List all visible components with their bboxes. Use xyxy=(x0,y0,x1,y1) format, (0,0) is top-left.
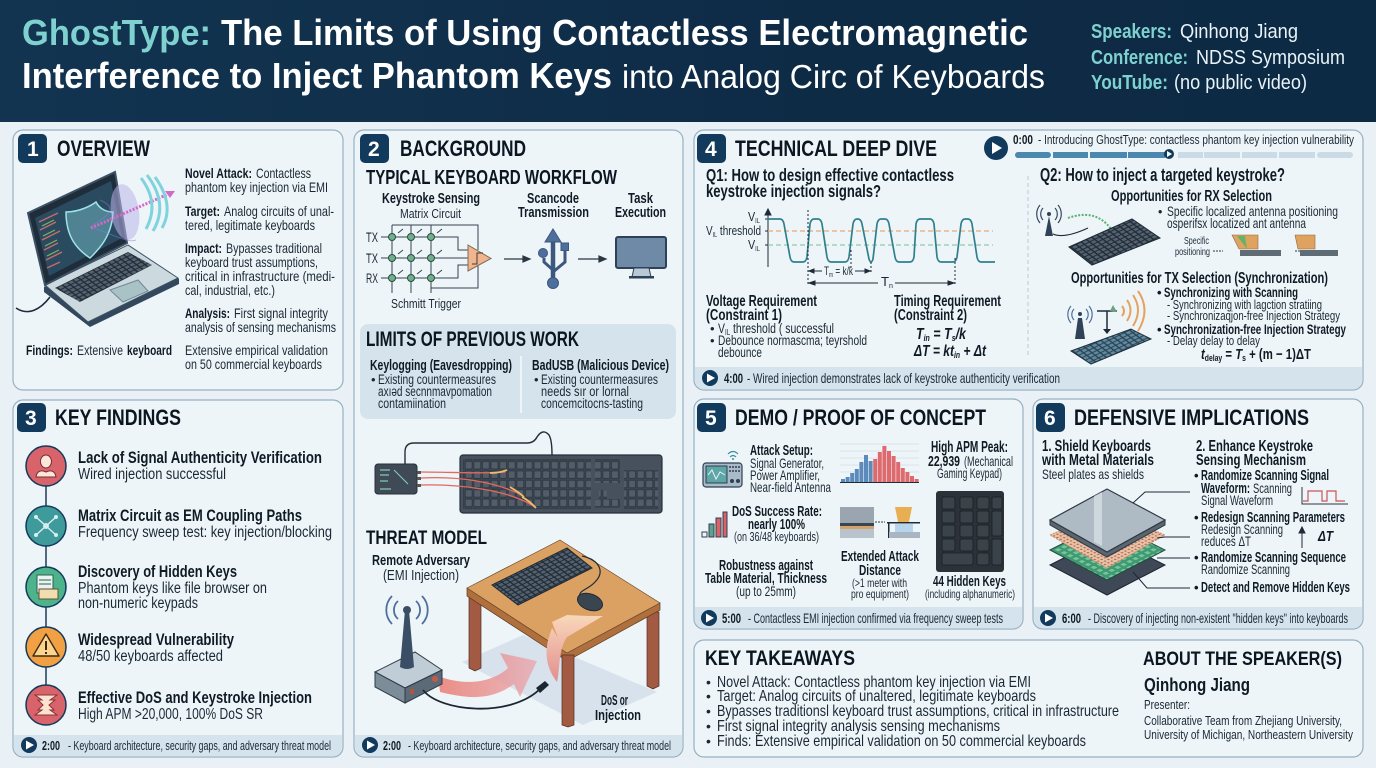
text block: enhance sensing: Waveform: xyxy=(1201,481,1250,497)
text block: overview bullets: First signal integrity xyxy=(234,305,328,321)
text block: attack setup: Power Amplifier, xyxy=(750,467,820,483)
panel: takeaways and speaker xyxy=(694,640,1363,757)
text block: RX selection xyxy=(1111,188,1338,231)
text block: RX selection: • xyxy=(1158,205,1162,219)
panel: defensive implications xyxy=(1033,399,1363,629)
divider xyxy=(1027,176,1029,356)
text block: TX selection: delay xyxy=(1205,353,1222,363)
text block: DoS success rate: (on 36/48 keyboards) xyxy=(734,529,819,544)
text block: key takeaways: Novel Attack: Contactless phantom key injection via EMI xyxy=(717,674,1031,691)
icon: antenna positioning diagram: positioning xyxy=(1175,247,1210,258)
text block: voltage requirement: threshold ( successful xyxy=(730,321,834,336)
text block: enhance sensing: reduces ΔT xyxy=(1201,533,1251,549)
chart: injection waveform timing: T xyxy=(881,274,889,289)
finding: signal authenticity: Lack of Signal Authenticity Verification xyxy=(78,449,322,467)
video timestamp strip: 6:00 xyxy=(1062,610,1081,626)
limit: BadUSB: • xyxy=(534,372,539,387)
heading: key findings: KEY FINDINGS xyxy=(55,405,181,430)
heading: demo: DEMO / PROOF OF CONCEPT xyxy=(735,405,986,430)
text block: robustness: Table Material, Thickness xyxy=(705,570,827,587)
label: DoS or injection xyxy=(595,692,641,724)
text block: robustness: Robustness against xyxy=(719,557,813,574)
text block: enhance sensing: • xyxy=(1194,468,1199,483)
text block: attack setup xyxy=(750,443,831,495)
text block: enhance sensing: Randomize Scanning xyxy=(1201,561,1290,577)
video timestamp strip: - Wired injection demonstrates lack of keystroke authenticity verification xyxy=(747,370,1060,386)
text block: key takeaways: Bypasses traditionsl keyboard trust assumptions, critical in infrastructure xyxy=(717,703,1119,720)
chart: matrix circuit with Schmitt trigger: TX xyxy=(366,229,378,245)
text block: timing requirement: = T xyxy=(930,326,953,343)
title: Interference to Inject Phantom Keys xyxy=(22,55,612,96)
text block: high APM peak: (Mechanical xyxy=(964,453,1013,469)
text block: high APM peak: Gaming Keypad) xyxy=(937,465,1002,481)
limit: keylogging: Existing countermeasures xyxy=(378,372,496,387)
label: DoS or injection: Injection xyxy=(595,707,641,724)
heading: Q1: keystroke injection signals? xyxy=(706,181,881,201)
limit: keylogging: contamiination xyxy=(378,396,446,411)
text block: enhance sensing xyxy=(1194,438,1350,596)
text block: overview bullets: Bypasses traditional xyxy=(226,240,322,256)
video timestamp strip: - Keyboard architecture, security gaps, and adversary threat model xyxy=(408,738,671,753)
heading: defensive implications: 6 xyxy=(1044,407,1056,430)
text block: DoS success rate: DoS Success Rate: xyxy=(732,503,822,520)
text block: findings: keyboard xyxy=(127,342,172,358)
text block: overview bullets: Extensive empirical validation xyxy=(185,342,328,358)
text block: overview bullets: Analog circuits of unal- xyxy=(224,203,334,219)
finding: DoS and keystroke injection: Effective DoS and Keystroke Injection xyxy=(78,689,312,707)
text block: TX selection: + (m − 1)ΔT xyxy=(1246,346,1311,363)
heading: demo: 5 xyxy=(705,407,717,430)
title xyxy=(22,12,1045,96)
title: The Limits of Using Contactless Electromagnetic xyxy=(221,12,1028,53)
chart: injection waveform timing xyxy=(706,209,995,290)
panel: key findings xyxy=(13,400,343,757)
text block: attack setup: Signal Generator, xyxy=(750,455,824,471)
heading: technical deep dive: 4 xyxy=(705,138,717,161)
video timestamp strip xyxy=(695,367,1362,390)
heading: overview xyxy=(18,134,150,163)
limit: BadUSB xyxy=(532,358,669,411)
workflow labels xyxy=(382,190,666,221)
limit: keylogging: axıəd secnnmavpomation xyxy=(378,384,492,399)
video timestamp strip xyxy=(355,735,682,756)
heading: background xyxy=(360,134,526,163)
limit: BadUSB: Existing countermeasures xyxy=(541,372,658,387)
text block: voltage requirement: V xyxy=(718,321,727,336)
finding: hidden keys xyxy=(26,563,267,612)
workflow labels: Execution xyxy=(615,204,666,221)
speaker details: (no public video) xyxy=(1174,72,1307,94)
text block: hidden keys: (including alphanumeric) xyxy=(925,587,1015,601)
text block: TX selection: • xyxy=(1157,285,1162,300)
text block: DoS success rate: nearly 100% xyxy=(748,516,805,533)
finding: hidden keys: Phantom keys like file browser on xyxy=(78,580,267,597)
icon: antenna transmitter xyxy=(375,596,549,709)
header banner xyxy=(0,0,1376,122)
text block: timing requirement: s xyxy=(952,333,956,343)
chart: scanning waveform xyxy=(1302,487,1348,504)
text block: about the speaker: Presenter: xyxy=(1144,697,1190,712)
chart: matrix circuit with Schmitt trigger: Schmitt Trigger xyxy=(391,296,462,311)
panel: overview xyxy=(13,130,343,390)
icon: laptop under electromagnetic attack xyxy=(16,172,179,327)
text block: robustness xyxy=(705,557,827,599)
finding: matrix circuit: Frequency sweep test: key injection/blocking xyxy=(78,524,332,541)
text block: TX selection: - Synchronizing with lagction stratiing xyxy=(1167,297,1322,312)
text block: overview bullets: critical in infrastructure (medi- xyxy=(185,268,335,284)
text block: overview bullets: Analysis: xyxy=(185,305,230,321)
chart: injection waveform timing: m xyxy=(829,272,833,279)
icon: wired injection into keyboard xyxy=(375,432,662,513)
video timestamp strip: 2:00 xyxy=(42,738,60,753)
text block: overview bullets: cal, industrial, etc.) xyxy=(185,282,275,298)
text block: enhance sensing: • xyxy=(1194,510,1199,525)
text block: key takeaways: First signal integrity analysis sensing mechanisms xyxy=(717,718,1000,735)
text block: overview bullets: analysis of sensing mechanisms xyxy=(185,319,336,335)
icon: USB xyxy=(538,229,568,288)
icon: desk with keyboard and mouse xyxy=(462,540,660,727)
text block: high APM peak xyxy=(928,439,1013,481)
text block: key takeaways: Finds: Extensive empirical validation on 50 commercial keyboards xyxy=(717,733,1086,750)
video timestamp strip: - Keyboard architecture, security gaps, and adversary threat model xyxy=(68,738,331,753)
text block: timing requirement: + Δt xyxy=(960,343,987,360)
text block: overview bullets: tered, legitimate keyboards xyxy=(185,217,315,233)
chart: injection waveform timing: V xyxy=(748,209,757,224)
chart: injection waveform timing: n xyxy=(889,283,893,290)
text block: RX selection: Opportunities for RX Selection xyxy=(1111,188,1272,205)
chart: injection waveform timing: IL xyxy=(713,232,717,239)
panel: limits of previous work xyxy=(360,324,676,419)
text block: attack setup: Attack Setup: xyxy=(750,443,813,459)
text block: TX selection xyxy=(1071,270,1346,363)
text block: timing requirement: in xyxy=(924,333,930,343)
video timestamp strip: 5:00 xyxy=(722,610,741,626)
limit: BadUSB: needs sır or lornal xyxy=(541,384,629,399)
text block: overview bullets: keyboard trust assumptions, xyxy=(185,254,318,270)
heading: background: 2 xyxy=(368,138,380,161)
text block: timing requirement: ΔT = kt xyxy=(914,343,967,360)
panel: limits of previous work: LIMITS OF PREVIOUS WORK xyxy=(366,328,579,351)
text block: voltage requirement xyxy=(706,293,867,360)
icon: table material and distance xyxy=(840,507,920,538)
text block: enhance sensing: • xyxy=(1194,580,1199,595)
finding: widespread vulnerability: 48/50 keyboards affected xyxy=(78,648,223,665)
text block: about the speaker: Qinhong Jiang xyxy=(1144,675,1250,695)
heading: defensive implications: DEFENSIVE IMPLICATIONS xyxy=(1074,405,1309,430)
text block: key takeaways: • xyxy=(706,674,711,690)
text block: voltage requirement: IL xyxy=(725,328,731,337)
text block: enhance sensing: 2. Enhance Keystroke xyxy=(1196,438,1313,455)
video progress timeline: 0:00 xyxy=(1013,132,1033,147)
heading: technical deep dive: TECHNICAL DEEP DIVE xyxy=(735,136,937,161)
text block: enhance sensing: • xyxy=(1194,550,1199,565)
subheading: workflow: TYPICAL KEYBOARD WORKFLOW xyxy=(366,167,617,189)
text block: timing requirement: T xyxy=(916,326,926,343)
text block: timing requirement: Timing Requirement xyxy=(894,293,1001,310)
video timestamp strip xyxy=(695,607,1022,628)
finding: hidden keys: Discovery of Hidden Keys xyxy=(78,563,237,581)
text block: about the speaker: ABOUT THE SPEAKER(S) xyxy=(1143,649,1342,670)
icon: keypad with hidden keys xyxy=(936,491,1004,572)
subheading: threat model: THREAT MODEL xyxy=(366,528,487,549)
text block: hidden keys: 44 Hidden Keys xyxy=(933,573,1006,590)
text block: extended distance xyxy=(841,548,919,601)
icon: TX antenna and keyboard xyxy=(1068,291,1151,364)
heading: Q1 xyxy=(706,165,954,201)
workflow labels: Task xyxy=(628,190,653,207)
icon: antenna positioning diagram xyxy=(1175,235,1338,258)
finding: widespread vulnerability: Widespread Vulnerability xyxy=(78,631,235,649)
timeline connector xyxy=(45,486,47,690)
icon: signal generator xyxy=(703,452,742,487)
text block: overview bullets: Contactless xyxy=(256,165,311,181)
arrow: EMI path from antenna to desk xyxy=(438,615,603,697)
chart: injection waveform timing: IL xyxy=(755,246,760,253)
finding: DoS and keystroke injection xyxy=(26,685,312,725)
panel: technical deep dive xyxy=(694,130,1363,390)
speaker details: Conference: xyxy=(1091,47,1188,69)
heading: overview: 1 xyxy=(27,138,39,161)
leader lines xyxy=(1133,492,1190,588)
video timestamp strip: 4:00 xyxy=(724,370,743,386)
chart: injection waveform timing: IL xyxy=(755,218,760,225)
finding: widespread vulnerability xyxy=(26,627,235,667)
text block: overview bullets: Novel Attack: xyxy=(185,165,252,181)
text block: timing requirement: (Constraint 2) xyxy=(894,307,967,324)
text block: hidden keys xyxy=(925,573,1015,601)
text block: findings: Extensive xyxy=(77,342,123,358)
icon: monitor xyxy=(616,237,666,278)
finding: DoS and keystroke injection: High APM >20,000, 100% DoS SR xyxy=(78,706,263,723)
heading: key findings: 3 xyxy=(25,407,37,430)
text block: TX selection: • xyxy=(1157,322,1162,337)
chart: injection waveform timing: V xyxy=(748,237,757,252)
arrow: delta T: ΔT xyxy=(1317,528,1334,545)
text block: key takeaways xyxy=(705,647,1119,750)
text block: key takeaways: • xyxy=(706,688,711,704)
text block: robustness: (up to 25mm) xyxy=(736,583,796,599)
text block: high APM peak: High APM Peak: xyxy=(931,439,1008,456)
text block: shield keyboards: with Metal Materials xyxy=(1041,452,1154,469)
text block: overview bullets: Target: xyxy=(185,203,220,219)
workflow labels: Scancode xyxy=(527,190,579,207)
text block: findings: Findings: xyxy=(26,342,73,358)
speaker details: YouTube: xyxy=(1091,72,1168,94)
text block: TX selection: s xyxy=(1242,353,1246,363)
video timestamp strip xyxy=(14,735,342,756)
text block: extended distance: Extended Attack xyxy=(841,548,919,565)
limit: BadUSB: BadUSB (Malicious Device) xyxy=(532,358,669,374)
text block: key takeaways: • xyxy=(706,718,711,734)
text block: TX selection: t xyxy=(1201,346,1206,363)
chart: matrix circuit with Schmitt trigger: TX xyxy=(366,250,378,266)
text block: extended distance: Distance xyxy=(859,562,901,579)
limit: BadUSB: concemcitocns-tasting xyxy=(541,396,643,411)
chart: APM frequency bars xyxy=(840,444,919,482)
threat model labels: Remote Adversary xyxy=(372,552,470,569)
limit: keylogging: Keylogging (Eavesdropping) xyxy=(370,358,512,374)
panel: demo / proof of concept xyxy=(694,399,1023,629)
text block: attack setup: Near-field Antenna xyxy=(750,479,831,495)
title: into Analog Circ of Keyboards xyxy=(622,58,1045,95)
threat model labels: (EMI Injection) xyxy=(383,567,459,584)
text block: voltage requirement: debounce xyxy=(718,345,762,360)
text block: shield keyboards xyxy=(1041,438,1154,482)
text block: TX selection: T xyxy=(1235,346,1244,363)
text block: enhance sensing: Sensing Mechanism xyxy=(1196,452,1306,469)
threat model labels xyxy=(372,552,470,584)
finding: hidden keys: non-numeric keypads xyxy=(78,595,198,612)
text block: voltage requirement: • xyxy=(710,333,715,348)
text block: key takeaways: KEY TAKEAWAYS xyxy=(705,647,855,670)
finding: matrix circuit xyxy=(26,506,332,546)
text block: TX selection: - Delay delay to delay xyxy=(1167,333,1260,348)
arrow: matrix to USB xyxy=(504,256,530,262)
chart: injection waveform timing: V xyxy=(706,223,715,238)
text block: timing requirement: /k xyxy=(955,326,967,343)
text block: overview bullets xyxy=(185,165,336,372)
chart: matrix circuit with Schmitt trigger: RX xyxy=(366,270,378,286)
text block: voltage requirement: • xyxy=(710,321,715,336)
text block: key takeaways: • xyxy=(706,703,711,719)
workflow labels: Matrix Circuit xyxy=(400,206,461,221)
title: GhostType: xyxy=(22,12,211,53)
icon: DoS bars xyxy=(702,512,727,537)
text block: overview bullets: on 50 commercial keyboards xyxy=(185,356,322,372)
chart: injection waveform timing: T xyxy=(824,264,831,278)
text block: extended distance: (>1 meter with xyxy=(852,576,907,590)
heading: Q1: Q1: How to design effective contactless xyxy=(706,165,954,185)
limit: keylogging xyxy=(370,358,512,411)
workflow labels: Keystroke Sensing xyxy=(382,190,480,207)
video timestamp strip xyxy=(1034,607,1362,628)
chart: matrix circuit with Schmitt trigger xyxy=(366,225,491,311)
heading: technical deep dive xyxy=(697,134,937,163)
icon: exploded keyboard layers xyxy=(1050,489,1165,595)
heading: overview: OVERVIEW xyxy=(57,136,150,161)
workflow labels: Transmission xyxy=(518,204,589,221)
heading: demo xyxy=(697,403,986,432)
text block: key takeaways: Target: Analog circuits of unaltered, legitimate keyboards xyxy=(717,688,1036,705)
text block: TX selection: Synchronizing with Scanning xyxy=(1164,284,1298,300)
panel: background xyxy=(354,130,683,757)
finding: matrix circuit: Matrix Circuit as EM Coupling Paths xyxy=(78,507,302,525)
finding: signal authenticity xyxy=(26,446,322,486)
icon: RX antenna and keyboard xyxy=(1037,205,1160,265)
heading: background: BACKGROUND xyxy=(400,136,526,161)
video timestamp strip: 2:00 xyxy=(383,738,401,753)
text block: RX selection: osperifsx locatized ant antenna xyxy=(1167,215,1306,231)
text block: overview bullets: phantom key injection via EMI xyxy=(185,179,328,195)
speaker details xyxy=(1091,21,1345,94)
heading: key findings xyxy=(17,403,181,432)
video progress timeline xyxy=(984,132,1354,160)
speaker details: NDSS Symposium xyxy=(1196,47,1345,69)
speaker details: Speakers: xyxy=(1091,21,1172,43)
chart: injection waveform timing: threshold xyxy=(717,223,761,238)
text block: key takeaways: • xyxy=(706,733,711,749)
text block: high APM peak: 22,939 xyxy=(928,453,960,470)
text block: extended distance: pro equipment) xyxy=(851,587,909,601)
icon: antenna positioning diagram: Specific xyxy=(1184,236,1209,247)
speaker details: Qinhong Jiang xyxy=(1180,21,1298,43)
text block: shield keyboards: Steel plates as shields xyxy=(1042,466,1144,482)
text block: voltage requirement: Debounce normascma; teyrshold xyxy=(718,333,867,348)
text block: timing requirement xyxy=(894,293,1001,360)
text block: timing requirement: in xyxy=(954,350,960,360)
text block: voltage requirement: (Constraint 1) xyxy=(706,307,782,324)
text block: about the speaker xyxy=(1143,649,1353,742)
text block: enhance sensing: Scanning xyxy=(1253,480,1292,496)
text block: enhance sensing: Redesign Scanning xyxy=(1201,521,1283,537)
text block: shield keyboards: 1. Shield Keyboards xyxy=(1042,438,1151,455)
chart: injection waveform timing: = k/k xyxy=(833,264,854,278)
text block: voltage requirement: Voltage Requirement xyxy=(706,293,817,310)
text block: overview bullets: Impact: xyxy=(185,240,222,256)
video timestamp strip: - Contactless EMI injection confirmed via frequency sweep tests xyxy=(748,610,1003,626)
arrow: USB to monitor xyxy=(578,256,606,262)
text block: DoS success rate xyxy=(732,503,822,544)
text block: enhance sensing: Signal Waveform xyxy=(1201,492,1273,508)
heading: defensive implications xyxy=(1036,403,1309,432)
text block: TX selection: = xyxy=(1222,346,1235,363)
arrow: delta T xyxy=(1299,527,1334,548)
finding: signal authenticity: Wired injection successful xyxy=(78,466,226,483)
limit: keylogging: • xyxy=(371,372,376,387)
label: DoS or injection: DoS or xyxy=(601,692,628,709)
text block: findings xyxy=(26,342,172,358)
